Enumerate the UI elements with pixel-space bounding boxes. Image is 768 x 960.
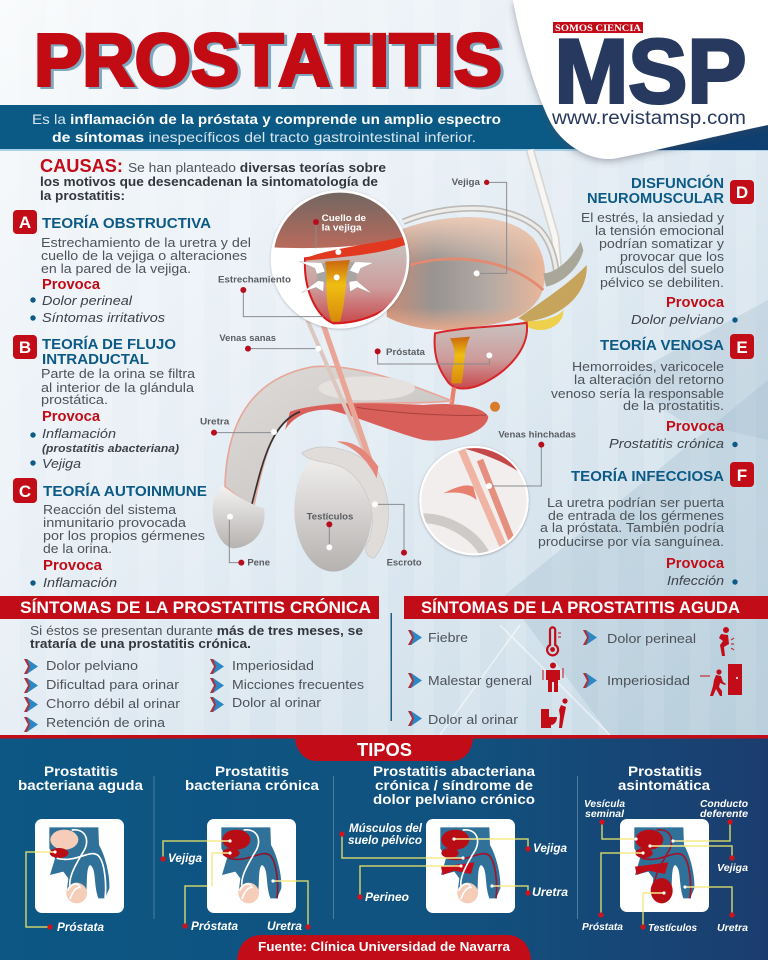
callout: Vejiga: Vejiga: [717, 862, 748, 874]
panel: teoría C: [13, 478, 207, 590]
causas intro: [40, 156, 386, 203]
panel: teoría B: TEORÍA DE FLUJO: [42, 336, 176, 353]
panel: teoría A: TEORÍA OBSTRUCTIVA: [42, 215, 212, 232]
heading: crónica: SÍNTOMAS DE LA PROSTATITIS CRÓNICA: [20, 598, 371, 617]
magnifier: swollen veins: [419, 446, 530, 557]
callout: Conducto deferente: [671, 798, 749, 843]
label: Cuello de la vejiga: la vejiga: [322, 222, 363, 232]
panel: teoría C: TEORÍA AUTOINMUNE: [43, 483, 207, 500]
chronic symptom list: [24, 658, 365, 732]
panel: síntomas aguda: [404, 596, 768, 728]
panel: teoría E: de la prostatitis.: [623, 398, 724, 413]
panel: teoría F: de entrada de los gérmenes: [548, 508, 725, 523]
panel: teoría D: D: [736, 183, 748, 202]
callout: Uretra: [683, 885, 748, 934]
label: Estrechamiento: Estrechamiento: [218, 274, 292, 284]
vas deferens: [307, 320, 385, 503]
callout: Próstata: Próstata: [57, 920, 104, 934]
type 1: bacteriana aguda: [18, 763, 143, 934]
panel: teoría B: Inflamación: [42, 426, 116, 441]
callout: Vejiga: [452, 837, 567, 855]
diagram 3: [440, 827, 500, 903]
seminal vesicles: [518, 242, 587, 330]
heading: aguda: SÍNTOMAS DE LA PROSTATITIS AGUDA: [421, 598, 740, 617]
panel: tipos: [0, 735, 768, 960]
callout: Vejiga: [160, 839, 232, 865]
icon: unwell person: [543, 662, 563, 692]
label: Cuello de la vejiga: [313, 213, 366, 255]
source tab: [237, 935, 531, 960]
label: Escroto: [372, 501, 422, 568]
diagram 2: [221, 827, 281, 903]
callout: Uretra: Uretra: [532, 885, 568, 899]
intro band: [0, 105, 768, 151]
label: Pene: Pene: [247, 558, 270, 568]
panel: teoría D: [581, 174, 754, 327]
callout: Próstata: [26, 850, 104, 934]
chronic symptom list: Imperiosidad: [232, 658, 314, 673]
callout: Próstata: [582, 851, 645, 933]
label: Vejiga: [452, 177, 507, 276]
panel: teoría B: prostática.: [41, 392, 108, 407]
logo tag: SOMOS CIENCIA: [555, 23, 642, 33]
panel: teoría F: producirse por vía sanguínea.: [538, 534, 724, 549]
title: PROSTATITIS: [34, 18, 502, 102]
label: Testículos: Testículos: [307, 511, 353, 521]
panel: teoría B: INTRADUCTAL: [42, 352, 149, 368]
logo panel: [513, 0, 768, 159]
prostate: [435, 323, 527, 404]
type 2: bacteriana crónica: [160, 763, 319, 933]
panel: teoría B: [13, 335, 196, 471]
chronic symptom list: Dificultad para orinar: [46, 677, 180, 692]
panel: teoría B: Parte de la orina se filtra: [41, 366, 196, 381]
panel: teoría B: B: [19, 338, 31, 357]
panel: teoría A: Provoca: [42, 277, 101, 293]
panel: teoría B: (prostatitis abacteriana): [42, 443, 179, 455]
causas intro: Se han planteado diversas teorías sobre: [128, 161, 386, 175]
panel: teoría B: Vejiga: [42, 456, 81, 471]
panel: teoría F: Infección: [667, 573, 724, 588]
bladder: [387, 208, 557, 330]
intro text: Es la inflamación de la próstata y comprende un amplio espectro: [32, 111, 501, 127]
panel: teoría D: DISFUNCIÓN: [631, 174, 724, 192]
panel: teoría E: [551, 334, 754, 451]
panel: teoría E: E: [736, 338, 748, 357]
tipos tab: TIPOS: [357, 740, 412, 760]
panel: teoría F: La uretra podrían ser puerta: [547, 495, 725, 510]
acute symptom list: Malestar general: [428, 673, 532, 688]
catheter tube: [530, 150, 558, 273]
causas intro: CAUSAS:: [40, 156, 123, 176]
source tab: Fuente: Clínica Universidad de Navarra: [258, 939, 511, 954]
label: Vejiga: Vejiga: [452, 177, 481, 187]
acute symptom list: [408, 630, 696, 727]
label: Uretra: Uretra: [200, 416, 230, 426]
panel: teoría C: Inflamación: [43, 575, 117, 590]
label: Pene: [227, 514, 270, 568]
callout: Uretra: [490, 884, 568, 899]
panel: teoría A: Dolor perineal: [42, 293, 133, 308]
panel: teoría F: F: [737, 466, 747, 485]
logo url: www.revistamsp.com: [551, 108, 746, 129]
intro text: de síntomas inespecíficos del tracto gastrointestinal inferior.: [52, 129, 476, 145]
panel: teoría A: A: [19, 213, 31, 232]
label: Venas sanas: [219, 333, 321, 352]
panel: teoría E: Prostatitis crónica: [609, 436, 724, 451]
diagram 1: [49, 827, 109, 903]
callout: Perineo: [357, 864, 463, 904]
panel: teoría D: Provoca: [666, 295, 725, 311]
panel: teoría C: C: [19, 482, 31, 501]
page background: [0, 0, 768, 740]
label: Próstata: [375, 347, 492, 364]
type 4: asintomática: asintomática: [618, 777, 710, 793]
anatomical illustration: [200, 150, 587, 572]
callout: Vesícula seminal: seminal: [585, 808, 625, 820]
panel: teoría E: la alteración del retorno: [574, 372, 724, 387]
chronic intro text: trataría de una prostatitis crónica.: [30, 636, 251, 651]
callout: Uretra: [267, 879, 311, 933]
panel: teoría F: Provoca: [666, 556, 725, 572]
panel: teoría A: Estrechamiento de la uretra y del: [41, 235, 251, 250]
callout: Conducto deferente: deferente: [700, 808, 748, 820]
icon: person on toilet: [541, 698, 568, 728]
panel: teoría F: a la próstata. También podría: [540, 520, 725, 535]
callout: Perineo: Perineo: [365, 890, 409, 904]
logo MSP: MSP: [554, 22, 746, 122]
type 3: abacteriana: crónica / síndrome de: [375, 777, 533, 793]
testicle: [294, 441, 388, 572]
tipos tab: [295, 737, 473, 761]
panel: teoría A: cuello de la vejiga o alteraciones: [41, 248, 248, 263]
acute symptom list: Dolor perineal: [607, 631, 696, 646]
callout: Vesícula seminal: Vesícula: [584, 798, 625, 810]
panel: teoría D: pélvico se debiliten.: [600, 275, 724, 290]
callout: Uretra: Uretra: [717, 922, 748, 934]
title: PROSTATITIS: [37, 20, 505, 104]
panel: teoría A: [13, 210, 251, 325]
callout: Músculos del suelo pélvico: [339, 821, 465, 860]
callout: Vejiga: Vejiga: [168, 851, 202, 865]
callout: Vejiga: [648, 844, 748, 874]
panel: teoría C: de la orina.: [43, 541, 112, 556]
icon: perineal pain person: [719, 627, 734, 656]
icon: running to door: [700, 664, 742, 696]
callout: Testículos: Testículos: [648, 922, 697, 934]
magnifier: bladder neck: [270, 190, 410, 328]
callout: Conducto deferente: Conducto: [700, 798, 749, 810]
label: Testículos: [307, 511, 353, 550]
panel: teoría A: en la pared de la vejiga.: [41, 261, 191, 276]
label: Próstata: Próstata: [386, 347, 426, 357]
panel: teoría C: por los propios gérmenes: [43, 528, 206, 543]
callout: Uretra: Uretra: [267, 919, 302, 933]
label: Escroto: Escroto: [387, 558, 422, 568]
type 3: abacteriana: Prostatitis abacteriana: [373, 763, 535, 779]
callout: Próstata: Próstata: [582, 921, 623, 933]
panel: teoría D: NEUROMUSCULAR: [587, 191, 725, 207]
panel: teoría C: inmunitario provocada: [43, 515, 187, 530]
panel: teoría B: al interior de la glándula: [41, 380, 195, 395]
panel: teoría E: venoso sería la responsable: [551, 386, 724, 401]
panel: teoría E: Hemorroides, varicocele: [572, 359, 724, 374]
acute symptom list: Dolor al orinar: [428, 712, 519, 727]
callout: Músculos del suelo pélvico: Músculos del: [349, 821, 423, 835]
type 4: asintomática: [582, 763, 749, 934]
chronic symptom list: Micciones frecuentes: [232, 677, 365, 692]
panel: teoría F: TEORÍA INFECCIOSA: [571, 468, 725, 485]
panel: teoría C: Reacción del sistema: [43, 502, 177, 517]
acute symptom list: Fiebre: [428, 630, 468, 645]
type 4: asintomática: Prostatitis: [628, 763, 702, 779]
causas intro: la prostatitis:: [40, 189, 125, 203]
chronic symptom list: Chorro débil al orinar: [46, 696, 181, 711]
panel: teoría A: Síntomas irritativos: [42, 310, 166, 325]
panel: teoría B: Provoca: [42, 409, 101, 425]
diagram 4: [634, 827, 694, 903]
callout: Testículos: [640, 891, 697, 934]
panel: teoría D: podrían somatizar y: [599, 236, 725, 251]
label: Cuello de la vejiga: Cuello de: [322, 213, 366, 223]
causas intro: los motivos que desencadenan la sintomatología de: [40, 175, 378, 189]
chronic intro text: Si éstos se presentan durante más de tres meses, se: [30, 623, 363, 638]
panel: teoría D: provocar que los: [620, 249, 725, 264]
callout: Próstata: [182, 851, 238, 933]
intro text: [32, 111, 501, 145]
acute symptom list: Imperiosidad: [607, 673, 690, 688]
icon: thermometer: [547, 627, 561, 655]
label: Venas hinchadas: Venas hinchadas: [498, 430, 576, 440]
panel: teoría E: TEORÍA VENOSA: [600, 337, 725, 354]
type 1: bacteriana aguda: bacteriana aguda: [18, 777, 143, 793]
label: Estrechamiento: [218, 274, 340, 317]
type 1: bacteriana aguda: Prostatitis: [44, 763, 118, 779]
penis: [213, 366, 500, 548]
panel: teoría F: [538, 462, 754, 588]
callout: Vejiga: Vejiga: [533, 841, 567, 855]
label: Venas hinchadas: [486, 430, 576, 489]
callout: Vesícula seminal: [584, 798, 638, 841]
type 2: bacteriana crónica: bacteriana crónica: [185, 777, 319, 793]
callout: Próstata: Próstata: [191, 919, 238, 933]
panel: teoría D: músculos del suelo: [605, 261, 724, 276]
label: Uretra: [200, 416, 277, 436]
panel: síntomas crónica: [0, 596, 379, 732]
type 3: abacteriana: [339, 763, 568, 913]
chronic symptom list: Retención de orina: [46, 715, 166, 730]
type 2: bacteriana crónica: Prostatitis: [215, 763, 289, 779]
panel: teoría D: la tensión emocional: [595, 223, 724, 238]
label: Venas sanas: Venas sanas: [219, 333, 276, 343]
chronic symptom list: Dolor al orinar: [232, 695, 322, 710]
chronic intro text: [30, 623, 363, 651]
panel: teoría E: Provoca: [666, 419, 725, 435]
callout: Músculos del suelo pélvico: suelo pélvico: [348, 833, 422, 847]
panel: teoría C: Provoca: [43, 558, 103, 574]
panel: teoría D: Dolor pelviano: [631, 312, 724, 327]
type 3: abacteriana: dolor pelviano crónico: [373, 791, 535, 807]
chronic symptom list: Dolor pelviano: [46, 658, 138, 673]
panel: teoría D: El estrés, la ansiedad y: [581, 210, 725, 225]
